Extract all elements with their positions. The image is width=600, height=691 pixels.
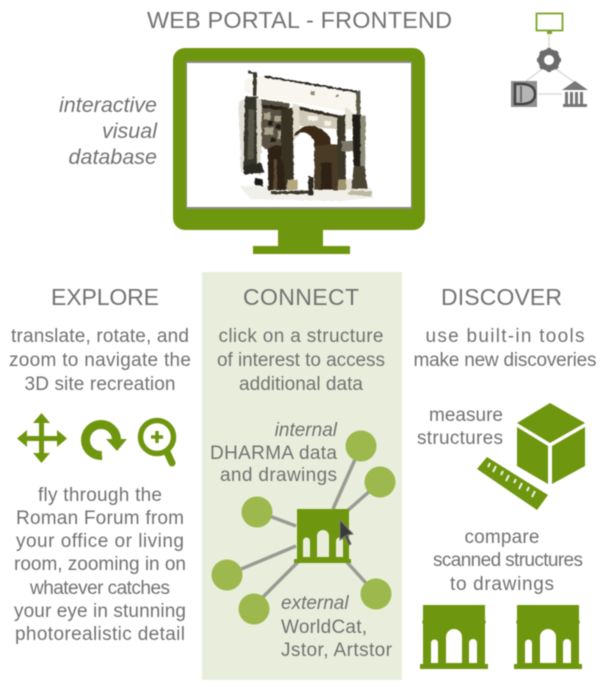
icon: rotate: [86, 425, 127, 456]
monitor icon: [173, 48, 425, 254]
text block: compare: scanned structures: [433, 550, 583, 571]
panel: explore: [9, 284, 191, 645]
text block: compare: compare: [464, 527, 540, 548]
icon: ruler: [477, 457, 548, 510]
text block: internal data: [210, 420, 338, 486]
text block: fly through: photorealistic detail: [15, 624, 185, 645]
text block: measure structures: structures: [417, 428, 503, 449]
text block: fly through: [14, 485, 186, 645]
image: scanned triumphal arch: [238, 71, 373, 201]
heading: explore: EXPLORE: [51, 284, 159, 310]
icon: dharma logo: [511, 81, 537, 107]
icon: museum: [562, 81, 588, 107]
icon: arch left: [420, 605, 488, 669]
text block: explore intro: 3D site recreation: [24, 374, 176, 395]
icon: small monitor: [536, 14, 562, 34]
text block: connect intro: of interest to access: [217, 350, 385, 371]
icon: gear: [537, 48, 561, 72]
icon: central arch: [294, 509, 351, 563]
small system diagram icon: [511, 14, 588, 107]
text block: explore intro: [9, 326, 191, 395]
text block: discover intro: make new discoveries: [414, 350, 596, 371]
text block: fly through: your office or living: [16, 531, 184, 552]
icon: move arrows: [17, 413, 67, 463]
icon: arch right: [514, 605, 582, 669]
icon: cursor: [340, 520, 353, 545]
text block: fly through: fly through the: [38, 485, 162, 506]
text block: internal data: DHARMA data: [210, 443, 337, 464]
text block: external data: [281, 593, 393, 661]
text block: compare: [433, 527, 583, 595]
text block: interactive visual database: [59, 93, 158, 169]
text block: interactive visual database: interactive: [59, 93, 157, 117]
icon: zoom magnifier: [140, 420, 174, 463]
text block: internal data: internal: [275, 420, 338, 441]
text block: external data: external: [281, 593, 349, 614]
text block: fly through: whatever catches: [29, 578, 170, 599]
text block: fly through: your eye in stunning: [14, 601, 186, 622]
text block: measure structures: [417, 405, 503, 449]
text block: explore intro: zoom to navigate the: [9, 350, 191, 371]
heading: connect: CONNECT: [243, 284, 359, 310]
text block: external data: WorldCat,: [281, 617, 367, 638]
heading: discover: DISCOVER: [441, 284, 562, 310]
text block: discover intro: use built-in tools: [426, 326, 584, 347]
text block: compare: to drawings: [450, 574, 554, 595]
text block: connect intro: additional data: [239, 374, 363, 395]
panel: discover: [414, 284, 596, 669]
text block: fly through: room, zooming in on: [14, 554, 186, 575]
text block: interactive visual database: database: [69, 145, 157, 169]
icon: cube: [517, 403, 585, 484]
text block: measure structures: measure: [429, 405, 503, 426]
text block: interactive visual database: visual: [102, 119, 158, 143]
text block: connect intro: click on a structure: [218, 326, 384, 347]
text block: connect intro: [217, 326, 385, 395]
panel: connect background: [202, 272, 402, 680]
text block: external data: Jstor, Artstor: [281, 640, 393, 661]
text block: discover intro: [414, 326, 596, 371]
text block: internal data: and drawings: [220, 465, 337, 486]
text block: explore intro: translate, rotate, and: [11, 326, 189, 347]
text block: fly through: Roman Forum from: [16, 508, 184, 529]
network diagram: [212, 430, 396, 624]
title: WEB PORTAL - FRONTEND: [147, 7, 452, 33]
panel: connect: [210, 284, 396, 661]
